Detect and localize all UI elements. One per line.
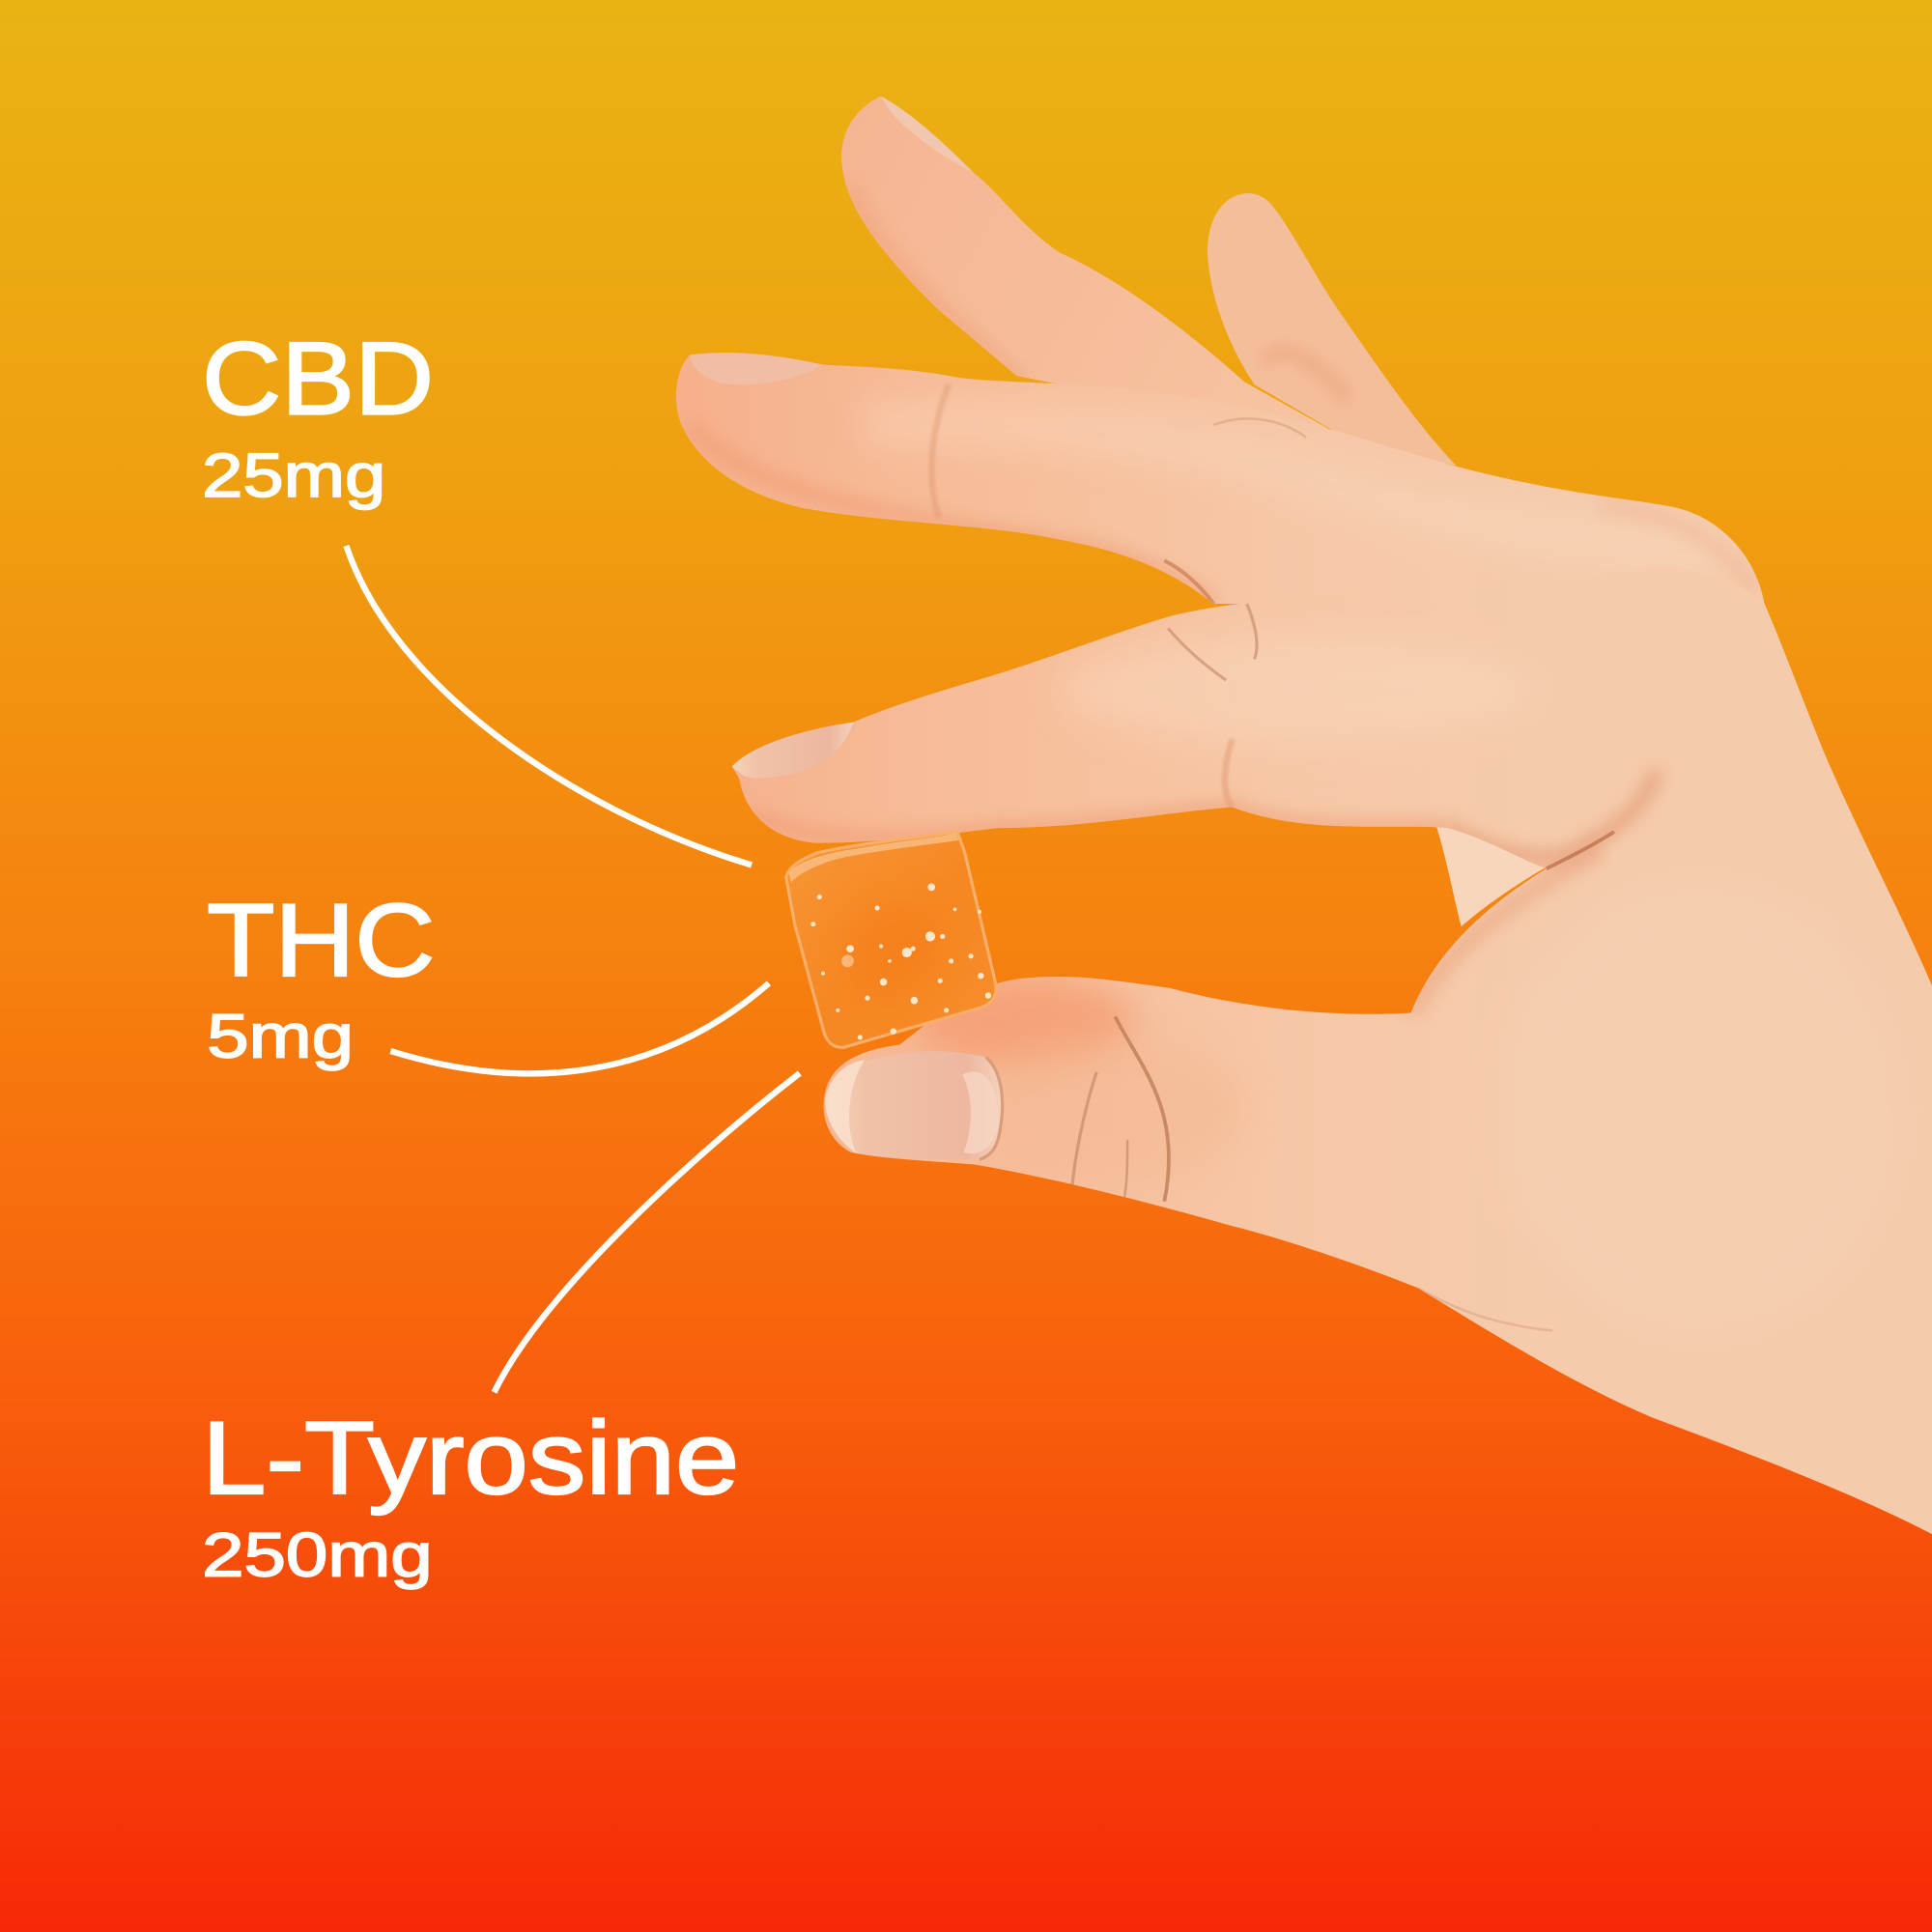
label: THC: THC	[207, 882, 435, 998]
middle finger	[666, 345, 1775, 616]
rear long finger	[841, 97, 1329, 429]
label: CBD: CBD	[202, 321, 434, 437]
connector line: THC	[390, 983, 769, 1073]
connector line: L-Tyrosine	[494, 1073, 800, 1392]
label: CBD	[202, 321, 434, 510]
label: L-Tyrosine: 250mg	[202, 1520, 433, 1589]
nail: middle finger	[690, 353, 823, 384]
palm highlights	[1070, 643, 1486, 736]
nail: index finger	[732, 722, 854, 779]
label: L-Tyrosine: L-Tyrosine	[202, 1400, 739, 1516]
finger behind the web	[1435, 823, 1550, 926]
nail: rear finger	[881, 96, 976, 174]
label: CBD: 25mg	[202, 440, 385, 510]
thumb tip blush	[912, 976, 1133, 1069]
connector line: CBD	[346, 546, 752, 865]
label: L-Tyrosine	[202, 1400, 739, 1589]
rear small finger	[1208, 193, 1457, 466]
web crease shading	[1448, 770, 1658, 858]
index underside shading	[752, 807, 1448, 838]
label: THC	[207, 882, 435, 1070]
gummy candy	[786, 832, 996, 1047]
nail: thumb	[849, 1051, 1001, 1159]
index finger, thumb and palm	[715, 554, 1932, 1540]
knuckle creases	[1168, 629, 1226, 680]
label: THC: 5mg	[207, 1001, 354, 1070]
hand holding gummy	[666, 86, 1932, 1540]
